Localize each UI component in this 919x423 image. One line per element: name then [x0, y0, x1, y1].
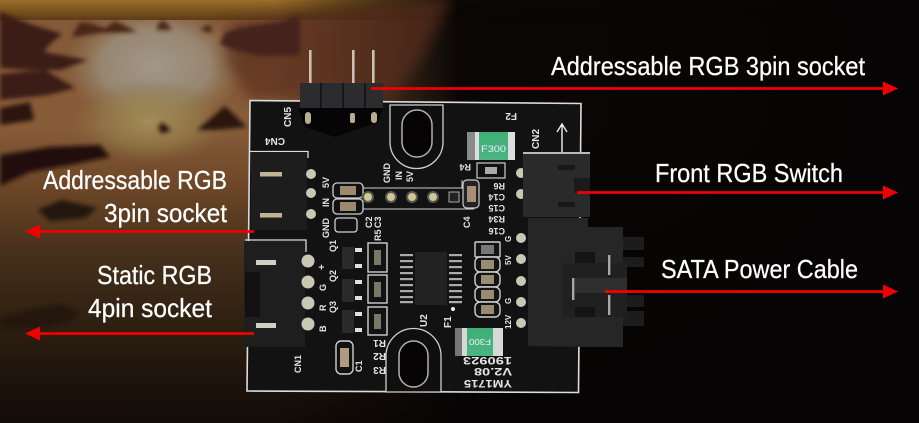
PCB silkscreen labels: F1 — [443, 316, 454, 328]
PCB silkscreen labels: 5V — [504, 255, 513, 265]
PCB silkscreen labels: C15 — [488, 203, 505, 213]
fuse F300 bottom — [455, 328, 503, 356]
PCB silkscreen labels: Q3 — [328, 301, 338, 313]
label: addressable RGB 3pin socket top: Addressable RGB 3pin socket — [551, 51, 866, 81]
arrow: addressable RGB left — [25, 224, 254, 238]
PCB silkscreen labels: 190923 — [463, 354, 512, 366]
PCB silkscreen labels: IN — [394, 171, 404, 180]
label: SATA power cable: SATA Power Cable — [661, 254, 858, 284]
PCB silkscreen labels: R6 — [493, 181, 505, 191]
CN3 SATA power connector — [528, 218, 627, 347]
PCB silkscreen labels: C1 — [354, 360, 364, 372]
PCB silkscreen labels: Q2 — [328, 270, 338, 282]
PCB silkscreen labels — [293, 110, 542, 389]
mounting slot bottom — [386, 329, 441, 392]
CN2 front switch connector — [523, 152, 590, 217]
transistors Q1 Q2 Q3 — [342, 243, 387, 335]
PCB silkscreen labels: 5V — [321, 177, 331, 188]
CN3 wires — [620, 237, 644, 326]
up arrow mark — [557, 124, 567, 152]
resistor array right — [475, 242, 500, 317]
PCB silkscreen labels: CN2 — [531, 129, 542, 149]
PCB silkscreen labels: G — [504, 236, 513, 242]
PCB silkscreen labels: R2 — [373, 350, 386, 361]
CN5 pin header — [298, 50, 383, 137]
PCB board — [244, 100, 644, 392]
PCB silkscreen labels: R — [318, 304, 328, 311]
PCB silkscreen labels: CN1 — [293, 355, 303, 373]
CN1 socket — [244, 240, 306, 347]
arrow: front RGB switch — [577, 186, 898, 200]
PCB silkscreen labels: 5V — [405, 171, 415, 182]
CN4 label: CN4 — [265, 135, 285, 146]
PCB silkscreen labels: GND — [382, 162, 392, 183]
label: addressable RGB 3pin socket left — [43, 165, 228, 228]
IC U2 chip — [400, 252, 462, 311]
PCB silkscreen labels: V2.08 — [474, 365, 512, 377]
CN4 socket — [250, 152, 308, 230]
PCB silkscreen labels: B — [318, 325, 328, 332]
label: static RGB 4pin socket — [88, 260, 213, 323]
fuse F300 bottom: F300 — [468, 337, 491, 346]
PCB silkscreen labels: R5 — [373, 229, 383, 241]
row of header through holes — [333, 180, 474, 232]
arrow: addressable RGB 3pin socket top — [371, 82, 898, 96]
PCB silkscreen labels: F2 — [505, 110, 517, 121]
PCB silkscreen labels: C16 — [488, 226, 505, 236]
PCB silkscreen labels: IN — [321, 198, 331, 207]
PCB silkscreen labels: GND — [321, 218, 331, 238]
PCB silkscreen labels: G — [318, 284, 328, 291]
label: addressable RGB 3pin socket left: 3pin socket — [104, 198, 228, 228]
PCB silkscreen labels: Q1 — [328, 240, 338, 252]
PCB silkscreen labels: R34 — [488, 214, 505, 224]
PCB silkscreen labels: C14 — [488, 192, 505, 202]
CN5 label: CN5 — [283, 107, 294, 127]
capacitor C4 R4 — [463, 163, 505, 208]
PCB silkscreen labels: R1 — [373, 337, 386, 348]
right connector pads — [516, 168, 526, 328]
arrow: static RGB left — [25, 326, 254, 340]
arrow: SATA power cable — [605, 284, 898, 298]
PCB silkscreen labels: YM1715 — [464, 377, 512, 389]
PCB silkscreen labels: R3 — [373, 364, 386, 375]
label: static RGB 4pin socket: Static RGB — [97, 260, 212, 290]
label: front RGB switch: Front RGB Switch — [655, 158, 843, 188]
PCB silkscreen labels: U2 — [419, 314, 430, 327]
solder pads left column — [302, 169, 316, 330]
PCB silkscreen labels: C4 — [462, 216, 472, 228]
capacitor C1 — [336, 341, 353, 374]
PCB silkscreen labels: C3 — [373, 216, 383, 228]
label: static RGB 4pin socket: 4pin socket — [88, 293, 213, 323]
PCB silkscreen labels: C2 — [364, 216, 374, 228]
label: addressable RGB 3pin socket left: Addressable RGB — [43, 165, 227, 195]
fuse F300 top — [467, 132, 515, 160]
PCB silkscreen labels: 12V — [504, 314, 513, 329]
mounting slot top — [390, 105, 443, 168]
fuse F300 top: F300 — [481, 144, 506, 155]
PCB silkscreen labels: G — [504, 298, 513, 304]
PCB silkscreen labels: + — [317, 264, 328, 270]
PCB silkscreen labels: R4 — [459, 162, 471, 172]
